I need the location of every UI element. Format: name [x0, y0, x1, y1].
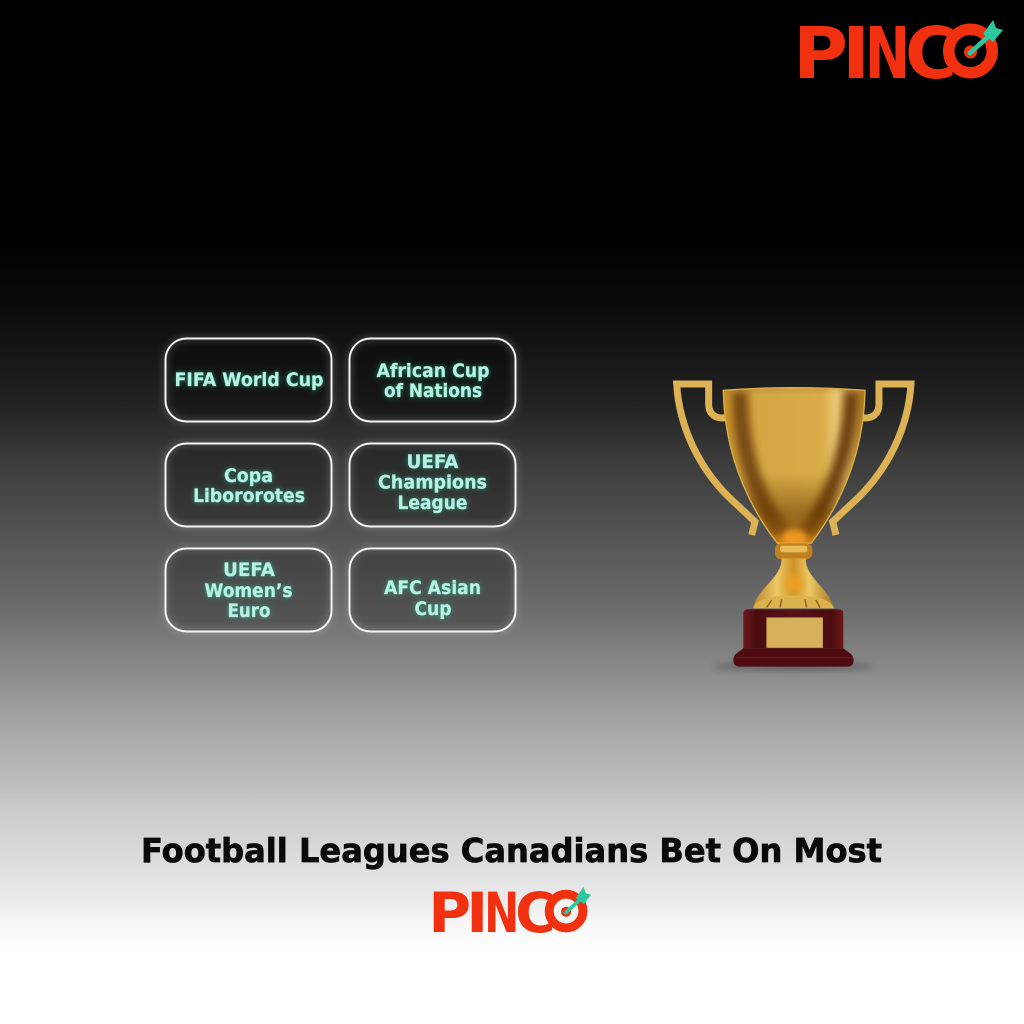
card: UEFA Champions League: League	[398, 492, 468, 514]
card: African Cup of Nations	[349, 338, 516, 422]
logo: top right PINCO: I	[842, 12, 870, 95]
title: Football Leagues Canadians Bet On Most	[141, 831, 882, 870]
card: FIFA World Cup	[165, 338, 332, 422]
card: UEFA Women's Euro: UEFA	[223, 559, 275, 581]
logo: bottom PINCO: N	[484, 881, 519, 945]
logo: bottom PINCO	[428, 881, 591, 945]
logo: top right PINCO: P	[793, 12, 848, 95]
card: UEFA Champions League: Champions	[378, 472, 487, 494]
card: AFC Asian Cup: Cup	[414, 598, 452, 620]
logo: bottom PINCO: P	[428, 881, 471, 945]
logo: top right PINCO: C	[905, 12, 957, 95]
logo: top right PINCO: N	[865, 12, 910, 95]
card: UEFA Women's Euro: Euro	[228, 600, 270, 622]
card: Copa Libororotes: Copa	[224, 465, 273, 487]
card: Copa Libororotes: Libororotes	[193, 485, 305, 507]
logo: bottom PINCO: I	[466, 881, 488, 945]
card: UEFA Women's Euro: Women’s	[204, 580, 292, 602]
card: African Cup of Nations: of Nations	[384, 380, 482, 402]
card: FIFA World Cup: FIFA World Cup	[174, 369, 324, 391]
logo: top right PINCO	[793, 12, 1003, 95]
icon: gold trophy	[677, 384, 911, 670]
card: AFC Asian Cup: AFC Asian	[384, 577, 481, 599]
card: UEFA Champions League	[349, 443, 516, 527]
league card grid	[165, 338, 516, 632]
card: Copa Libororotes	[165, 443, 332, 527]
logo: bottom PINCO: C	[515, 881, 556, 945]
card: AFC Asian Cup	[349, 548, 516, 632]
card: African Cup of Nations: African Cup	[376, 360, 490, 382]
card: UEFA Women's Euro	[165, 548, 332, 632]
card: UEFA Champions League: UEFA	[406, 451, 459, 473]
